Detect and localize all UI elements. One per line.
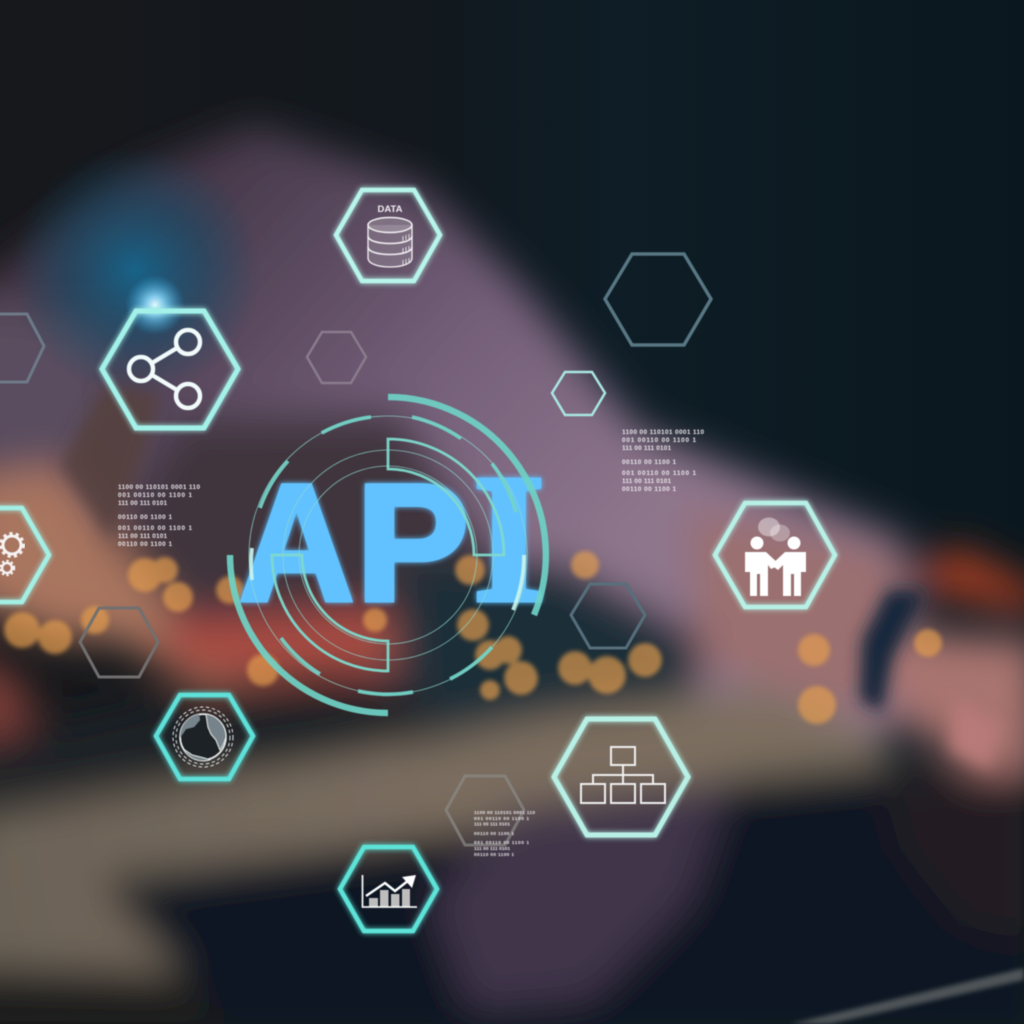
- binary text block: bottom: [474, 810, 535, 858]
- faint decorative hexagons: [0, 254, 711, 845]
- binary text block: right: 111 00 111 0101: [622, 445, 671, 452]
- title: API: P: [356, 451, 469, 636]
- icon: data: [336, 190, 440, 281]
- wrist and fingertip details: [60, 385, 1000, 770]
- binary text block: right: 001 00110 00 1100 1: [622, 470, 696, 477]
- binary text block: bottom: 00110 00 1100 1: [474, 831, 514, 837]
- outer arcs: [230, 397, 546, 713]
- binary text block: left: 111 00 111 0101: [118, 500, 167, 507]
- binary text block: left: 001 00110 00 1100 1: [118, 525, 192, 532]
- icon: globe: [156, 695, 253, 779]
- segmented arcs: [251, 417, 524, 694]
- binary text block: right: 111 00 111 0101: [622, 478, 671, 485]
- binary text block: bottom: 111 00 111 0101: [474, 846, 510, 852]
- thin rings: [249, 416, 527, 694]
- icon: growth chart: [340, 847, 437, 931]
- icon: gears: [0, 508, 49, 602]
- binary text block: bottom: 001 00110 00 1100 1: [474, 816, 529, 822]
- blue glow behind finger: [10, 145, 260, 395]
- bokeh lights: [4, 551, 942, 724]
- tablet edge: [790, 968, 1024, 1024]
- binary text block: left: [118, 484, 200, 548]
- binary text block: left: 00110 00 1100 1: [118, 541, 172, 548]
- icon: organization chart: [554, 719, 688, 835]
- binary text block: left: 111 00 111 0101: [118, 533, 167, 540]
- bracket arcs: [272, 439, 504, 671]
- title: API: A: [239, 451, 354, 636]
- binary text block: left: 001 00110 00 1100 1: [118, 492, 192, 499]
- binary text block: bottom: 111 00 111 0101: [474, 822, 510, 828]
- binary text block: bottom: 1100 00 110101 0001 110: [474, 810, 535, 816]
- icon: share: [102, 311, 238, 428]
- binary text block: right: 00110 00 1100 1: [622, 486, 676, 493]
- title: API: I: [473, 437, 545, 640]
- binary text block: right: 001 00110 00 1100 1: [622, 437, 696, 444]
- binary text block: left: 1100 00 110101 0001 110: [118, 484, 200, 491]
- binary text block: right: 00110 00 1100 1: [622, 459, 676, 466]
- title: API: [239, 437, 545, 640]
- binary text block: bottom: 00110 00 1100 1: [474, 852, 514, 858]
- binary text block: right: 1100 00 110101 0001 110: [622, 429, 704, 436]
- icon: data: DATA: [378, 204, 403, 215]
- icon: people shaking hands: [715, 503, 835, 607]
- binary text block: bottom: 001 00110 00 1100 1: [474, 840, 529, 846]
- binary text block: left: 00110 00 1100 1: [118, 514, 172, 521]
- binary text block: right: [622, 429, 704, 493]
- central ring graphic: [230, 397, 546, 713]
